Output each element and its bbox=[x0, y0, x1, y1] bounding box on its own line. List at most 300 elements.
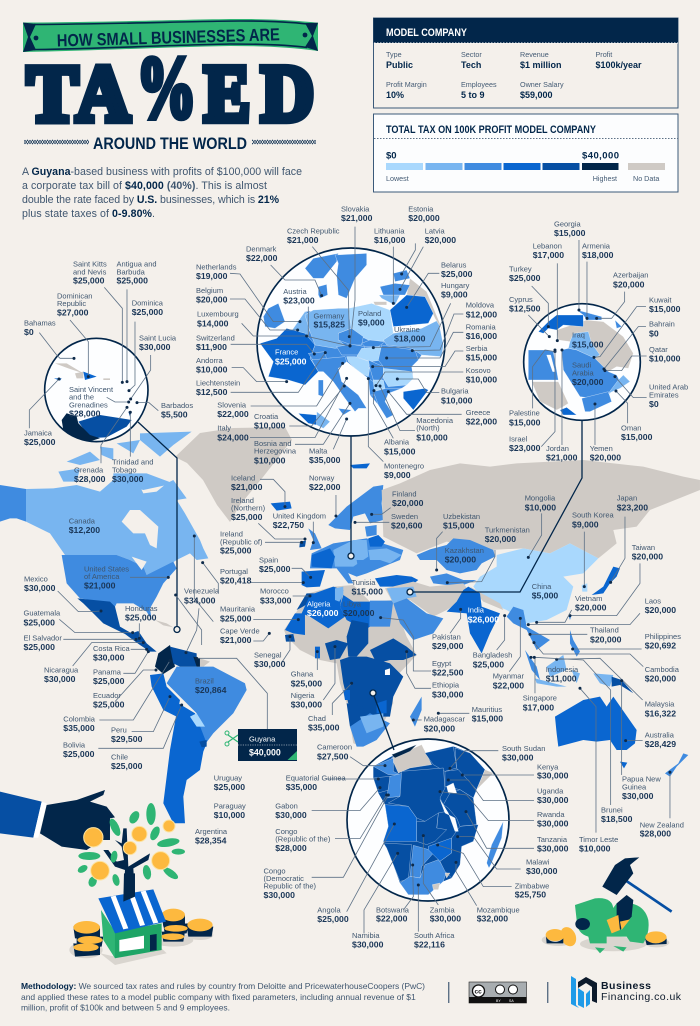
labels: americas and west of map: Panama bbox=[93, 667, 121, 676]
labels: caribbean: Antigua and bbox=[116, 260, 157, 268]
labels: americas and west of map: $25,000 bbox=[291, 678, 322, 688]
labels: americas and west of map: $30,000 bbox=[24, 583, 56, 593]
labels: africa: Kenya bbox=[537, 762, 558, 771]
labels: europe: Austria bbox=[283, 287, 307, 296]
labels: europe: Liechtenstein bbox=[196, 378, 240, 387]
labels: americas and west of map: $21,000 bbox=[84, 581, 116, 591]
title: TAXED: D bbox=[261, 50, 314, 138]
labels: middle east: $20,000 bbox=[590, 453, 621, 463]
labels: africa: South Sudan bbox=[502, 744, 545, 753]
labels: europe: $21,000 bbox=[287, 235, 319, 245]
labels: caribbean: and the bbox=[69, 393, 94, 402]
labels: europe: Greece bbox=[466, 408, 490, 417]
labels: americas and west of map: Ecuador bbox=[93, 691, 121, 700]
labels: asia and oceania: Singapore bbox=[523, 694, 557, 703]
divider and CC badge: SA bbox=[509, 999, 514, 1003]
labels: europe: Moldova bbox=[466, 301, 494, 310]
intro text: double the rate faced by U.S. businesses, which is 21% bbox=[22, 194, 280, 206]
labels: middle east: Bahrain bbox=[649, 320, 675, 329]
labels: africa: Tanzania bbox=[537, 835, 567, 844]
labels: middle east bbox=[509, 219, 688, 463]
labels: americas and west of map: United Kingdom bbox=[273, 512, 326, 521]
inset: europe circle bbox=[257, 248, 445, 436]
labels: americas and west of map: Honduras bbox=[125, 604, 158, 613]
labels: asia and oceania: Turkmenistan bbox=[485, 525, 530, 534]
labels: caribbean bbox=[24, 260, 193, 484]
labels: caribbean: Grenada bbox=[74, 465, 103, 474]
labels: middle east: Azerbaijan bbox=[613, 271, 648, 280]
labels: caribbean: Saint Lucia bbox=[139, 334, 176, 343]
labels: asia and oceania: Uzbekistan bbox=[443, 512, 480, 521]
labels: europe: $9,000 bbox=[384, 470, 411, 480]
labels: middle east: $15,000 bbox=[509, 417, 541, 427]
labels: americas and west of map: Cape Verde bbox=[220, 626, 260, 635]
labels: asia and oceania: $10,000 bbox=[579, 843, 611, 853]
labels: americas and west of map: $30,000 bbox=[291, 700, 322, 710]
labels: asia and oceania: $20,000 bbox=[590, 634, 622, 644]
labels: africa: Congo bbox=[264, 866, 286, 875]
labels: europe: Italy bbox=[217, 424, 231, 433]
labels: asia and oceania: Mauritius bbox=[472, 705, 502, 714]
logo: business financing: Financing.co.uk bbox=[601, 991, 682, 1003]
labels: middle east: $10,000 bbox=[649, 354, 681, 364]
labels: europe: Switzerland bbox=[196, 333, 235, 342]
map: asia bbox=[385, 538, 633, 693]
panel: model company: $100k/year bbox=[596, 60, 642, 70]
panel: model company: Sector bbox=[461, 50, 482, 59]
labels: asia and oceania: Timor Leste bbox=[579, 835, 618, 844]
leader lines: asia and oceania bbox=[355, 508, 670, 833]
panel: model company: Profit Margin bbox=[386, 80, 427, 89]
labels: americas and west of map: $25,000 bbox=[24, 617, 55, 627]
map: north america bbox=[0, 432, 208, 620]
labels: asia and oceania: Vietnam bbox=[575, 594, 602, 603]
labels: asia and oceania: Madagascar bbox=[424, 715, 465, 724]
labels: middle east: Yemen bbox=[590, 444, 613, 453]
labels: americas and west of map: $12,200 bbox=[69, 525, 100, 535]
labels: asia and oceania: New Zealand bbox=[640, 820, 684, 829]
labels: europe: France bbox=[275, 348, 298, 357]
labels: europe: Romania bbox=[466, 322, 496, 331]
labels: asia and oceania: China bbox=[532, 582, 551, 591]
labels: europe: Lithuania bbox=[374, 227, 404, 236]
labels: europe: $20,000 bbox=[408, 213, 440, 223]
labels: americas and west of map: $10,000 bbox=[214, 810, 245, 820]
labels: africa: (Democratic bbox=[264, 874, 304, 883]
labels: caribbean: Jamaica bbox=[24, 429, 52, 438]
labels: americas and west of map: $22,000 bbox=[309, 482, 341, 492]
labels: asia and oceania: $20,000 bbox=[645, 605, 676, 615]
labels: asia and oceania: Taiwan bbox=[632, 543, 655, 552]
labels: europe: $10,000 bbox=[254, 455, 286, 465]
labels: europe: $23,000 bbox=[283, 296, 315, 306]
labels: middle east: Emirates bbox=[649, 390, 679, 399]
labels: europe: $18,000 bbox=[394, 334, 426, 344]
labels: americas and west of map: $34,000 bbox=[184, 595, 216, 605]
panel: legend total tax: $0 bbox=[386, 150, 397, 162]
labels: americas and west of map: United States bbox=[84, 564, 129, 573]
labels: europe: $10,000 bbox=[416, 432, 448, 442]
labels: europe: Bosnia and bbox=[254, 439, 292, 448]
labels: africa: $27,500 bbox=[317, 751, 349, 761]
labels: caribbean: $25,000 bbox=[73, 276, 105, 286]
connector lines from inset circles to map bbox=[138, 421, 582, 750]
labels: europe: $10,000 bbox=[254, 421, 286, 431]
labels: americas and west of map: $21,000 bbox=[220, 635, 252, 645]
labels: middle east: Kuwait bbox=[649, 295, 672, 304]
labels: asia and oceania: $20,600 bbox=[391, 521, 423, 531]
labels: caribbean: Saint Vincent bbox=[69, 385, 113, 394]
leader lines: americas and west africa bbox=[58, 479, 352, 748]
labels: africa: Uganda bbox=[537, 787, 563, 796]
labels: americas and west of map: (Republic of) bbox=[220, 537, 263, 546]
labels: middle east: Turkey bbox=[509, 264, 532, 273]
labels: asia and oceania: $15,000 bbox=[472, 713, 503, 723]
labels: africa: Angola bbox=[317, 905, 341, 914]
labels: asia and oceania: $16,322 bbox=[645, 708, 676, 718]
labels: asia and oceania: Cambodia bbox=[645, 665, 679, 674]
leader lines: africa inset bbox=[312, 751, 534, 933]
labels: europe: Hungary bbox=[441, 281, 469, 290]
labels: asia and oceania: $5,000 bbox=[532, 591, 558, 601]
labels: caribbean: $30,000 bbox=[139, 342, 171, 352]
labels: americas and west of map: Senegal bbox=[254, 650, 282, 659]
labels: africa: $25,000 bbox=[317, 914, 349, 924]
labels: africa: $32,000 bbox=[477, 914, 508, 924]
labels: middle east: $17,000 bbox=[533, 250, 564, 260]
labels: americas and west of map: Guatemala bbox=[24, 609, 60, 618]
labels: middle east: $0 bbox=[649, 328, 659, 338]
labels: europe: $22,000 bbox=[466, 417, 497, 427]
labels: americas and west of map: Venezuela bbox=[184, 587, 219, 596]
labels: americas and west of map bbox=[24, 474, 375, 846]
labels: americas and west of map: $30,000 bbox=[93, 653, 125, 663]
callout: guyana: Guyana bbox=[249, 734, 276, 744]
labels: middle east: $25,000 bbox=[509, 273, 541, 283]
labels: africa: Rwanda bbox=[537, 810, 565, 819]
labels: africa: Equatorial Guinea bbox=[286, 774, 346, 783]
labels: europe: $35,000 bbox=[309, 455, 341, 465]
leader lines: eastern europe and middle east bbox=[350, 227, 647, 462]
labels: asia and oceania: Thailand bbox=[590, 626, 619, 635]
labels: africa: $30,000 bbox=[275, 810, 307, 820]
labels: americas and west of map: $20,418 bbox=[220, 576, 252, 586]
labels: africa: $25,750 bbox=[515, 890, 546, 900]
labels: europe: $12,500 bbox=[196, 387, 228, 397]
labels: europe: Slovakia bbox=[341, 205, 369, 214]
labels: asia and oceania: $20,000 bbox=[392, 498, 424, 508]
labels: africa: $30,000 bbox=[537, 843, 569, 853]
labels: americas and west of map: Norway bbox=[309, 474, 334, 483]
labels: europe: Belgium bbox=[196, 286, 223, 295]
labels: americas and west of map: Brazil bbox=[195, 676, 214, 685]
labels: europe: $15,000 bbox=[384, 446, 416, 456]
labels: europe: $10,000 bbox=[466, 375, 497, 385]
labels: africa: Botswana bbox=[376, 905, 409, 914]
labels: asia and oceania: South Korea bbox=[572, 511, 614, 520]
labels: europe: $20,000 bbox=[425, 235, 456, 245]
labels: asia and oceania: $15,000 bbox=[352, 587, 383, 597]
title: TAXED: % bbox=[136, 40, 196, 137]
labels: middle east: Qatar bbox=[649, 345, 668, 354]
labels: americas and west of map: $22,750 bbox=[273, 520, 304, 530]
panel: model company: Revenue bbox=[520, 50, 549, 59]
labels: caribbean: Barbuda bbox=[116, 267, 146, 276]
labels: caribbean: Dominica bbox=[132, 298, 163, 307]
labels: africa: Republic of the) bbox=[264, 882, 317, 891]
labels: asia and oceania: $20,692 bbox=[645, 641, 676, 651]
map: russia bbox=[382, 460, 700, 558]
labels: americas and west of map: Ireland bbox=[220, 530, 243, 539]
labels: middle east: United Arab bbox=[649, 383, 688, 392]
labels: europe: $20,000 bbox=[196, 295, 228, 305]
map: greenland bbox=[175, 427, 292, 522]
labels: americas and west of map: $25,000 bbox=[231, 512, 263, 522]
intro text: a corporate tax bill of $40,000 (40%). This is almost bbox=[22, 180, 267, 192]
labels: americas and west of map: $26,000 bbox=[307, 608, 339, 618]
labels: europe: Herzegovina bbox=[254, 447, 297, 456]
labels: asia and oceania bbox=[352, 489, 684, 853]
labels: asia and oceania: Laos bbox=[645, 596, 661, 605]
labels: caribbean: Saint Kitts bbox=[73, 260, 107, 268]
panel: legend total tax: Highest bbox=[593, 174, 617, 183]
labels: africa bbox=[264, 743, 569, 949]
labels: europe: $10,000 bbox=[441, 395, 473, 405]
labels: middle east: Arabia bbox=[572, 368, 595, 377]
labels: asia and oceania: Pakistan bbox=[432, 632, 461, 641]
subtitle: around the world bbox=[24, 135, 316, 153]
labels: americas and west of map: Colombia bbox=[63, 714, 95, 723]
labels: asia and oceania: Kazakhstan bbox=[445, 546, 484, 555]
labels: caribbean: Republic bbox=[57, 299, 86, 308]
labels: caribbean: $28,000 bbox=[74, 474, 106, 484]
labels: africa: Namibia bbox=[352, 931, 380, 940]
labels: americas and west of map: Bolivia bbox=[63, 740, 85, 749]
labels: europe: Croatia bbox=[254, 412, 278, 421]
labels: europe: $9,000 bbox=[358, 318, 385, 328]
labels: middle east: $20,000 bbox=[613, 279, 645, 289]
labels: americas and west of map: Nigeria bbox=[291, 691, 314, 700]
labels: americas and west of map: $30,000 bbox=[254, 659, 286, 669]
labels: caribbean: Bahamas bbox=[24, 319, 56, 328]
panel: model company: Public bbox=[386, 60, 413, 70]
labels: americas and west of map: Paraguay bbox=[214, 801, 246, 810]
labels: europe: $15,000 bbox=[466, 353, 497, 363]
labels: africa: $30,000 bbox=[430, 914, 461, 924]
panel: model company: Profit bbox=[596, 50, 612, 59]
labels: asia and oceania: Bangladesh bbox=[473, 651, 512, 660]
labels: middle east: Palestine bbox=[509, 409, 540, 418]
labels: asia and oceania: India bbox=[468, 606, 484, 615]
labels: americas and west of map: of America bbox=[84, 572, 120, 581]
labels: asia and oceania: $15,000 bbox=[443, 521, 475, 531]
labels: middle east: Israel bbox=[509, 434, 527, 443]
labels: europe: Poland bbox=[358, 309, 381, 318]
labels: asia and oceania: Malaysia bbox=[645, 700, 674, 709]
labels: americas and west of map: Peru bbox=[111, 725, 127, 734]
labels: middle east: $0 bbox=[649, 399, 659, 409]
labels: europe: Belarus bbox=[441, 260, 466, 269]
labels: americas and west of map: Libya bbox=[343, 600, 361, 609]
labels: europe: Germany bbox=[314, 311, 344, 320]
labels: europe: $10,000 bbox=[196, 365, 228, 375]
labels: asia and oceania: $20,000 bbox=[575, 603, 607, 613]
labels: europe: $16,000 bbox=[374, 235, 406, 245]
labels: americas and west of map: Morocco bbox=[260, 587, 289, 596]
map: australia and new zealand bbox=[555, 697, 688, 777]
methodology text bbox=[21, 981, 425, 1012]
illustration: hand and money tree shop bbox=[0, 790, 213, 965]
labels: africa: $30,000 bbox=[502, 752, 534, 762]
labels: americas and west of map: $35,000 bbox=[63, 723, 95, 733]
labels: middle east: $15,000 bbox=[621, 432, 653, 442]
labels: europe: $16,000 bbox=[466, 331, 497, 341]
labels: europe: $22,000 bbox=[246, 253, 278, 263]
intro text bbox=[22, 166, 302, 220]
labels: asia and oceania: $11,000 bbox=[546, 674, 577, 684]
panel: legend total tax bbox=[374, 114, 678, 192]
labels: americas and west of map: $25,000 bbox=[63, 749, 95, 759]
labels: middle east: $18,000 bbox=[582, 250, 614, 260]
labels: europe: Macedonia bbox=[416, 416, 453, 425]
labels: asia and oceania: $29,000 bbox=[432, 641, 464, 651]
labels: americas and west of map: $30,000 bbox=[44, 674, 76, 684]
labels: americas and west of map: Mauritania bbox=[220, 605, 255, 614]
labels: americas and west of map: Uruguay bbox=[214, 774, 242, 783]
labels: middle east: Oman bbox=[621, 423, 641, 432]
labels: asia and oceania: $9,000 bbox=[572, 519, 599, 529]
labels: europe: Netherlands bbox=[196, 262, 236, 271]
labels: americas and west of map: El Salvador bbox=[24, 633, 62, 642]
labels: middle east: $15,000 bbox=[572, 339, 604, 349]
labels: americas and west of map: $25,000 bbox=[220, 546, 252, 556]
labels: americas and west of map: $25,000 bbox=[125, 613, 157, 623]
labels: caribbean: $27,000 bbox=[57, 308, 89, 318]
labels: africa: $30,000 bbox=[264, 890, 295, 900]
labels: asia and oceania: $22,500 bbox=[432, 667, 464, 677]
labels: americas and west of map: Ireland bbox=[231, 496, 254, 505]
map: africa bbox=[284, 585, 422, 747]
labels: asia and oceania: Japan bbox=[617, 494, 637, 503]
labels: europe: $24,000 bbox=[217, 432, 249, 442]
labels: americas and west of map: $29,500 bbox=[111, 734, 143, 744]
panel: legend total tax: Lowest bbox=[386, 174, 409, 183]
labels: americas and west of map: $21,000 bbox=[231, 482, 263, 492]
labels: europe: $14,000 bbox=[197, 318, 229, 328]
panel: model company: MODEL COMPANY bbox=[386, 27, 468, 39]
labels: africa: $30,000 bbox=[526, 866, 558, 876]
labels: europe: Andorra bbox=[196, 356, 223, 365]
labels: middle east: $23,000 bbox=[509, 443, 541, 453]
labels: europe: Slovenia bbox=[217, 400, 246, 409]
labels: caribbean: $25,000 bbox=[24, 437, 56, 447]
labels: asia and oceania: Brunei bbox=[601, 806, 623, 815]
inset: caribbean circle bbox=[45, 338, 148, 443]
labels: europe: $19,000 bbox=[196, 271, 228, 281]
labels: americas and west of map: Spain bbox=[259, 556, 278, 565]
labels: caribbean: and Nevis bbox=[73, 267, 107, 276]
title: TAXED bbox=[27, 40, 314, 138]
labels: africa: $30,000 bbox=[537, 818, 569, 828]
divider and CC badge bbox=[448, 982, 548, 1003]
labels: asia and oceania: Myanmar bbox=[493, 672, 524, 681]
labels: americas and west of map: Chile bbox=[111, 752, 128, 761]
labels: middle east: $12,500 bbox=[509, 304, 541, 314]
title: TAXED: A bbox=[76, 50, 130, 138]
labels: africa: Cameroon bbox=[317, 743, 352, 752]
labels: middle east: Lebanon bbox=[533, 241, 562, 250]
labels: asia and oceania: $20,000 bbox=[424, 723, 455, 733]
labels: africa: Zimbabwe bbox=[515, 881, 549, 890]
labels: asia and oceania: $25,000 bbox=[473, 659, 504, 669]
labels: europe: $25,000 bbox=[441, 269, 473, 279]
labels: asia and oceania: $28,000 bbox=[640, 829, 671, 839]
labels: europe: $21,000 bbox=[341, 213, 373, 223]
labels: americas and west of map: Argentina bbox=[195, 827, 227, 836]
labels: europe: $9,000 bbox=[441, 290, 468, 300]
labels: africa: Zambia bbox=[430, 905, 455, 914]
labels: middle east: $20,000 bbox=[572, 377, 604, 387]
labels: asia and oceania: $22,000 bbox=[493, 680, 524, 690]
subtitle: around the world: AROUND THE WORLD bbox=[93, 135, 247, 153]
labels: asia and oceania: Indonesia bbox=[546, 665, 578, 674]
labels: americas and west of map: Ghana bbox=[291, 670, 313, 679]
labels: americas and west of map: Nicaragua bbox=[44, 665, 78, 674]
labels: europe: $11,900 bbox=[196, 342, 227, 352]
labels: asia and oceania: $23,200 bbox=[617, 502, 648, 512]
labels: americas and west of map: $25,000 bbox=[214, 782, 245, 792]
panel: legend total tax: $40,000 bbox=[582, 150, 619, 162]
panel: model company: 10% bbox=[386, 90, 404, 100]
labels: americas and west of map: $20,864 bbox=[195, 685, 227, 695]
panel: model company: $59,000 bbox=[520, 90, 553, 100]
panel: model company: Owner Salary bbox=[520, 80, 564, 89]
panel: model company: Type bbox=[386, 50, 402, 59]
labels: africa: $22,116 bbox=[414, 939, 445, 949]
labels: caribbean: Tobago bbox=[112, 465, 137, 474]
divider and CC badge: cc bbox=[474, 988, 482, 996]
labels: americas and west of map: $25,000 bbox=[24, 642, 55, 652]
labels: americas and west of map: Canada bbox=[69, 517, 95, 526]
labels: africa: $35,000 bbox=[286, 782, 317, 792]
labels: asia and oceania: Mongolia bbox=[525, 494, 555, 503]
labels: europe: $25,000 bbox=[275, 356, 307, 366]
labels: middle east: Iraq bbox=[572, 331, 585, 340]
labels: europe: (North) bbox=[416, 424, 440, 433]
panel: model company: Employees bbox=[461, 80, 497, 89]
illustration: broken piggy bank and hammer bbox=[542, 857, 672, 953]
labels: asia and oceania: $20,000 bbox=[632, 552, 663, 562]
labels: caribbean: $25,000 bbox=[132, 307, 163, 317]
labels: europe: Luxembourg bbox=[197, 310, 239, 319]
labels: middle east: Saudi bbox=[572, 361, 591, 370]
labels: asia and oceania: $30,000 bbox=[622, 791, 654, 801]
labels: caribbean: Dominican bbox=[57, 292, 92, 301]
labels: americas and west of map: $25,000 bbox=[93, 676, 125, 686]
labels: caribbean: Grenadines bbox=[69, 400, 108, 409]
panel: legend total tax: TOTAL TAX ON 100K PROFIT MODEL COMPANY bbox=[386, 124, 597, 136]
labels: americas and west of map: $25,000 bbox=[111, 761, 143, 771]
labels: caribbean: $0 bbox=[24, 327, 34, 337]
labels: europe: Malta bbox=[309, 446, 327, 455]
labels: americas and west of map: $33,000 bbox=[260, 595, 292, 605]
methodology text: and applied these rates to a model public company with fixed parameters, including annual revenue of $1 bbox=[21, 992, 416, 1002]
labels: europe: Denmark bbox=[246, 245, 276, 254]
labels: caribbean: $25,000 bbox=[116, 276, 148, 286]
labels: africa: $30,000 bbox=[537, 770, 569, 780]
title: TAXED: E bbox=[204, 50, 250, 138]
labels: africa: $22,000 bbox=[376, 914, 408, 924]
